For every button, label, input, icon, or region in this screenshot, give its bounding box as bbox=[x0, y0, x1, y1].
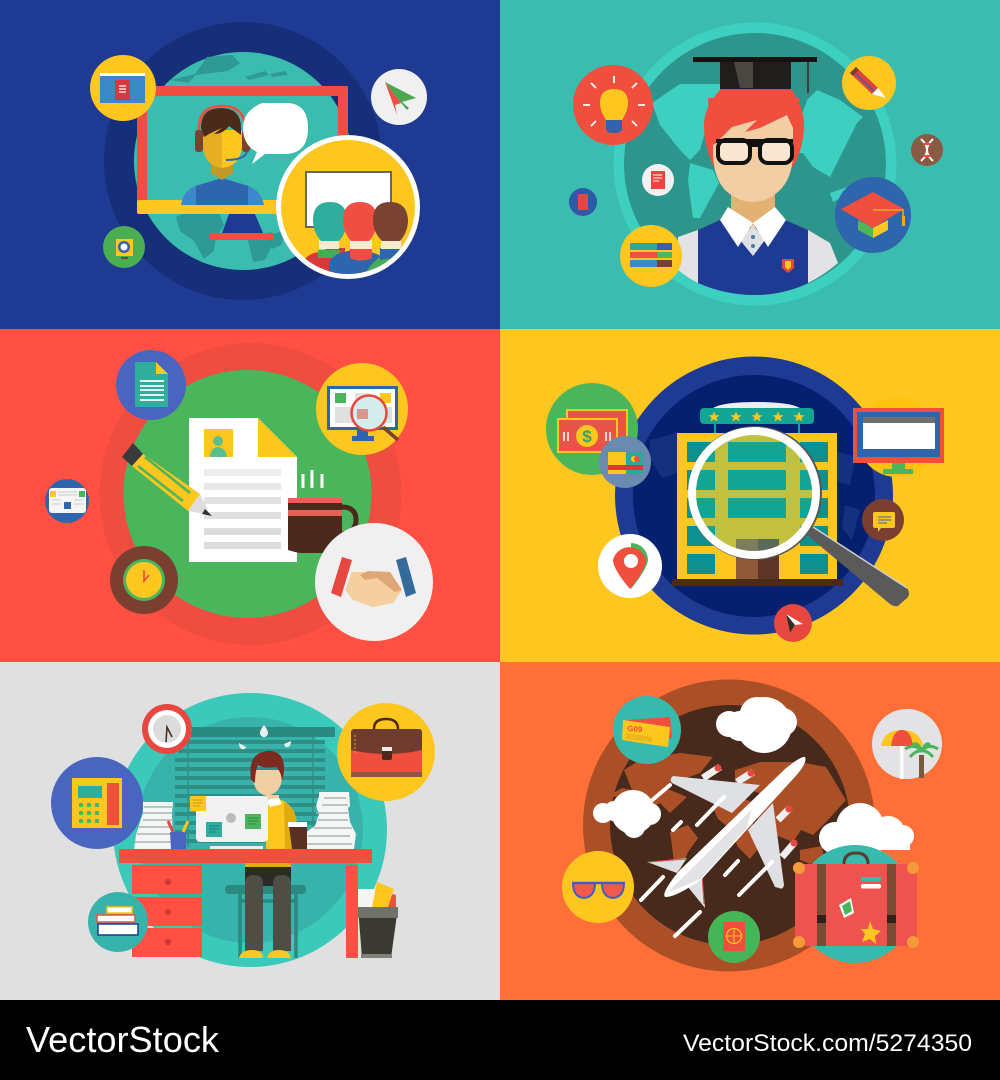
icon: sunglasses bbox=[562, 851, 634, 923]
panel: hotel search bbox=[500, 329, 1000, 662]
icon: document badge bbox=[116, 350, 186, 420]
icon: webcam bbox=[103, 226, 145, 268]
icon: handshake bbox=[315, 523, 433, 641]
panel: job application bbox=[0, 329, 500, 662]
icon: suitcase bbox=[793, 845, 919, 963]
airplane bbox=[641, 757, 806, 936]
icon: browser window bbox=[90, 55, 156, 121]
icon: briefcase bbox=[337, 703, 435, 801]
icon: newspaper bbox=[45, 479, 89, 523]
icon: map pin bbox=[598, 534, 662, 598]
icon: notebook bbox=[569, 188, 597, 216]
icon: browser monitor bbox=[853, 397, 944, 477]
panel: online support bbox=[0, 0, 500, 329]
icon: passport bbox=[708, 911, 760, 963]
resume sheet bbox=[189, 418, 297, 562]
icon: pencil bbox=[842, 56, 896, 110]
icon: cursor badge bbox=[774, 604, 812, 642]
icon: credit card bbox=[599, 436, 651, 488]
icon: wall clock bbox=[142, 704, 192, 754]
waste bin bbox=[358, 882, 398, 958]
window blinds bbox=[175, 725, 335, 847]
icon: dna bbox=[911, 134, 943, 166]
image url: VectorStock.com/5274350 bbox=[683, 1030, 972, 1057]
icon: books bbox=[88, 892, 148, 952]
worker bbox=[239, 751, 297, 958]
magnifying glass bbox=[687, 426, 909, 606]
icon: monitor with magnifier bbox=[316, 363, 408, 455]
pencil bbox=[122, 443, 212, 516]
icon: ticket: G09 bbox=[627, 724, 643, 734]
icon: money bbox=[546, 383, 638, 475]
support agent bbox=[181, 106, 264, 205]
speech bubble bbox=[243, 103, 308, 164]
cloud left bbox=[593, 790, 661, 838]
hotel building bbox=[672, 402, 843, 586]
graduation cap bbox=[693, 57, 817, 93]
footer bbox=[0, 1000, 1000, 1080]
laptop bbox=[190, 796, 268, 849]
icon: audience presentation bbox=[276, 135, 420, 290]
icon: light bulb bbox=[573, 65, 653, 145]
panel: travel bbox=[500, 662, 1000, 1000]
icon: money: $ bbox=[582, 427, 592, 446]
student figure bbox=[678, 90, 838, 295]
paper stacks bbox=[134, 792, 356, 849]
icon: graduation hat bbox=[835, 177, 911, 253]
icon: phone bbox=[51, 757, 143, 849]
monitor bbox=[137, 86, 348, 240]
brand name: VectorStock bbox=[26, 1019, 220, 1060]
desk bbox=[119, 849, 372, 958]
icon: beach umbrella bbox=[872, 709, 942, 779]
office chair bbox=[225, 885, 306, 958]
icon: cursor bbox=[371, 69, 427, 125]
icon: chat bubble bbox=[862, 499, 904, 541]
icon: clock bbox=[110, 546, 178, 614]
icon: document bbox=[642, 164, 674, 196]
cloud right bbox=[819, 803, 914, 857]
icon: ticket bbox=[613, 696, 681, 764]
coffee cup bbox=[288, 470, 356, 553]
icon: book stack bbox=[620, 225, 682, 287]
cloud top bbox=[716, 697, 797, 753]
panel: education bbox=[500, 0, 1000, 329]
panel: office worker bbox=[0, 662, 500, 1000]
